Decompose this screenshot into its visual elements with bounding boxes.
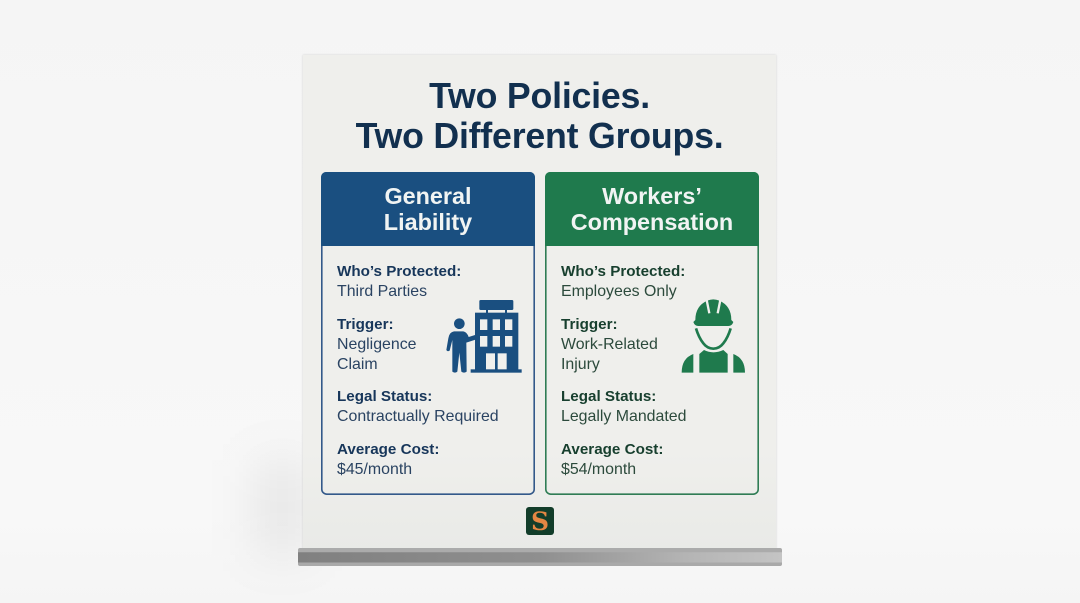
logo: S badge [526,507,554,535]
heading: general liability: General [384,183,472,209]
title: Two Different Groups. [356,116,723,156]
title: Two Policies. [429,76,650,116]
text: trigger [561,316,658,373]
text: legal status [337,388,499,425]
heading: workers' compensation: Compensation [571,209,733,235]
text: trigger [337,316,417,373]
sign base [298,548,782,566]
text: average cost: Average Cost: [561,440,663,458]
icon: worker with hard hat [682,299,745,373]
text: trigger: Injury [561,356,600,373]
text: average cost [337,440,439,478]
text: legal status: Legal Status: [561,388,656,405]
sign panel [303,55,776,550]
text: who's protected: Employees Only [561,283,677,300]
text: average cost: $54/month [561,460,636,478]
text: legal status: Legal Status: [337,388,432,405]
text: who's protected: Who’s Protected: [561,263,685,280]
text: average cost: $45/month [337,460,412,478]
text: legal status: Legally Mandated [561,408,686,425]
text: trigger: Claim [337,356,378,373]
text: average cost [561,440,663,478]
text: who's protected: Who’s Protected: [337,263,461,280]
icon: person and building [446,300,522,373]
text: who's protected [561,263,685,300]
heading: general liability [384,183,472,235]
panel outline [321,172,535,495]
text: who's protected [337,263,461,300]
text: who's protected: Third Parties [337,283,427,300]
panel: general liability [321,172,535,495]
sign shadow [255,460,310,555]
heading: workers' compensation: Workers’ [602,183,702,209]
panel header [545,172,759,246]
heading: general liability: Liability [384,209,472,235]
panel outline [545,172,759,495]
title [356,76,723,156]
text: trigger: Trigger: [561,316,618,333]
heading: workers' compensation [571,183,733,235]
panel: workers' compensation [545,172,759,495]
text: trigger: Work-Related [561,336,658,353]
panel header [321,172,535,246]
text: trigger: Negligence [337,336,417,353]
logo: S badge: S [531,507,549,536]
text: trigger: Trigger: [337,316,394,333]
text: legal status: Contractually Required [337,408,499,425]
text: average cost: Average Cost: [337,440,439,458]
text: legal status [561,388,686,425]
